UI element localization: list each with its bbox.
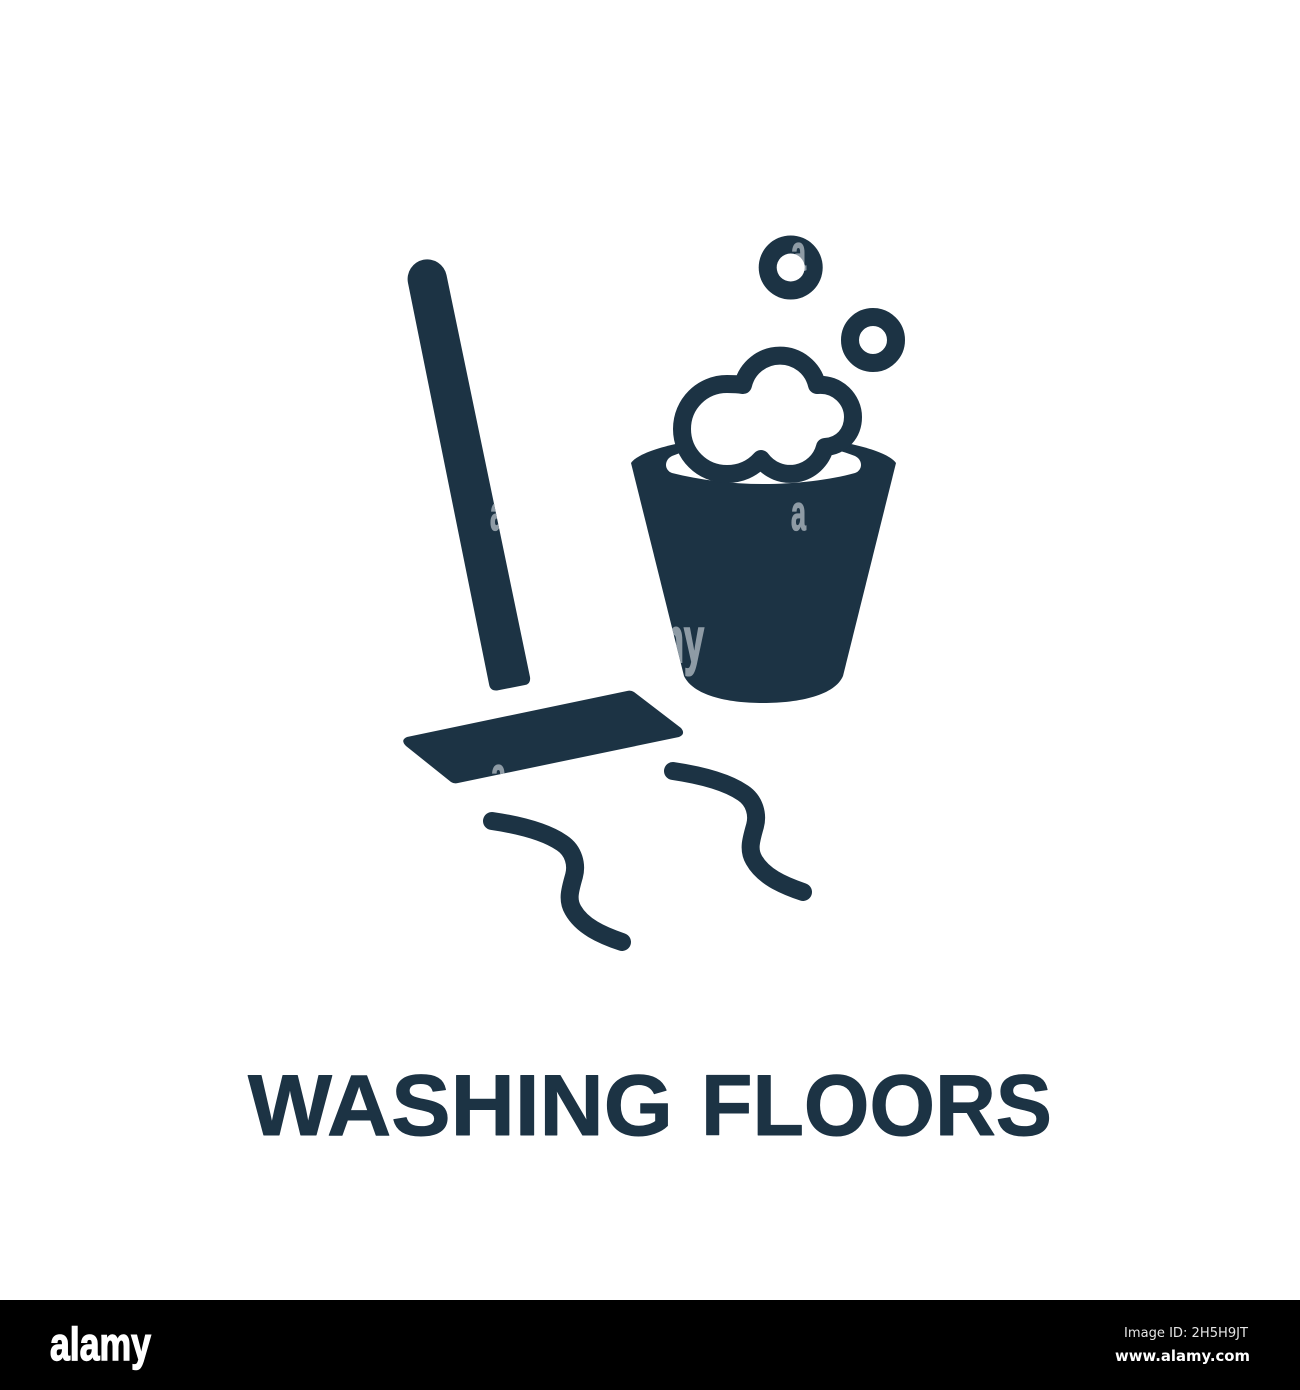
- footer image id: Image ID: 2H5H9JT: [1124, 1325, 1249, 1341]
- watermark on mop: a: [491, 747, 507, 803]
- icon: mop handle: [408, 259, 530, 691]
- title: [248, 1058, 1052, 1154]
- icon: mop head: [403, 691, 683, 783]
- icon: lower bubble: [850, 317, 896, 363]
- title: WASHING: [248, 1058, 673, 1154]
- footer website: www.alamy.com: [1115, 1347, 1250, 1365]
- icon: mop and bucket: [403, 225, 896, 942]
- title: FLOORS: [701, 1058, 1052, 1154]
- watermark at bucket edge: my: [652, 604, 704, 676]
- icon: bucket: [631, 436, 896, 703]
- footer bar: [0, 1300, 1300, 1390]
- footer logo: alamy: [50, 1318, 151, 1370]
- icon: right water squiggle: [673, 771, 803, 892]
- icon: left water squiggle: [492, 821, 622, 942]
- watermark on handle: a: [490, 485, 506, 541]
- icon: upper bubble: a: [791, 225, 807, 281]
- watermark on bucket: a: [791, 485, 807, 541]
- icon: bucket opening: [666, 442, 861, 484]
- icon: foam cloud: [682, 356, 853, 474]
- icon: upper bubble: [758, 236, 823, 300]
